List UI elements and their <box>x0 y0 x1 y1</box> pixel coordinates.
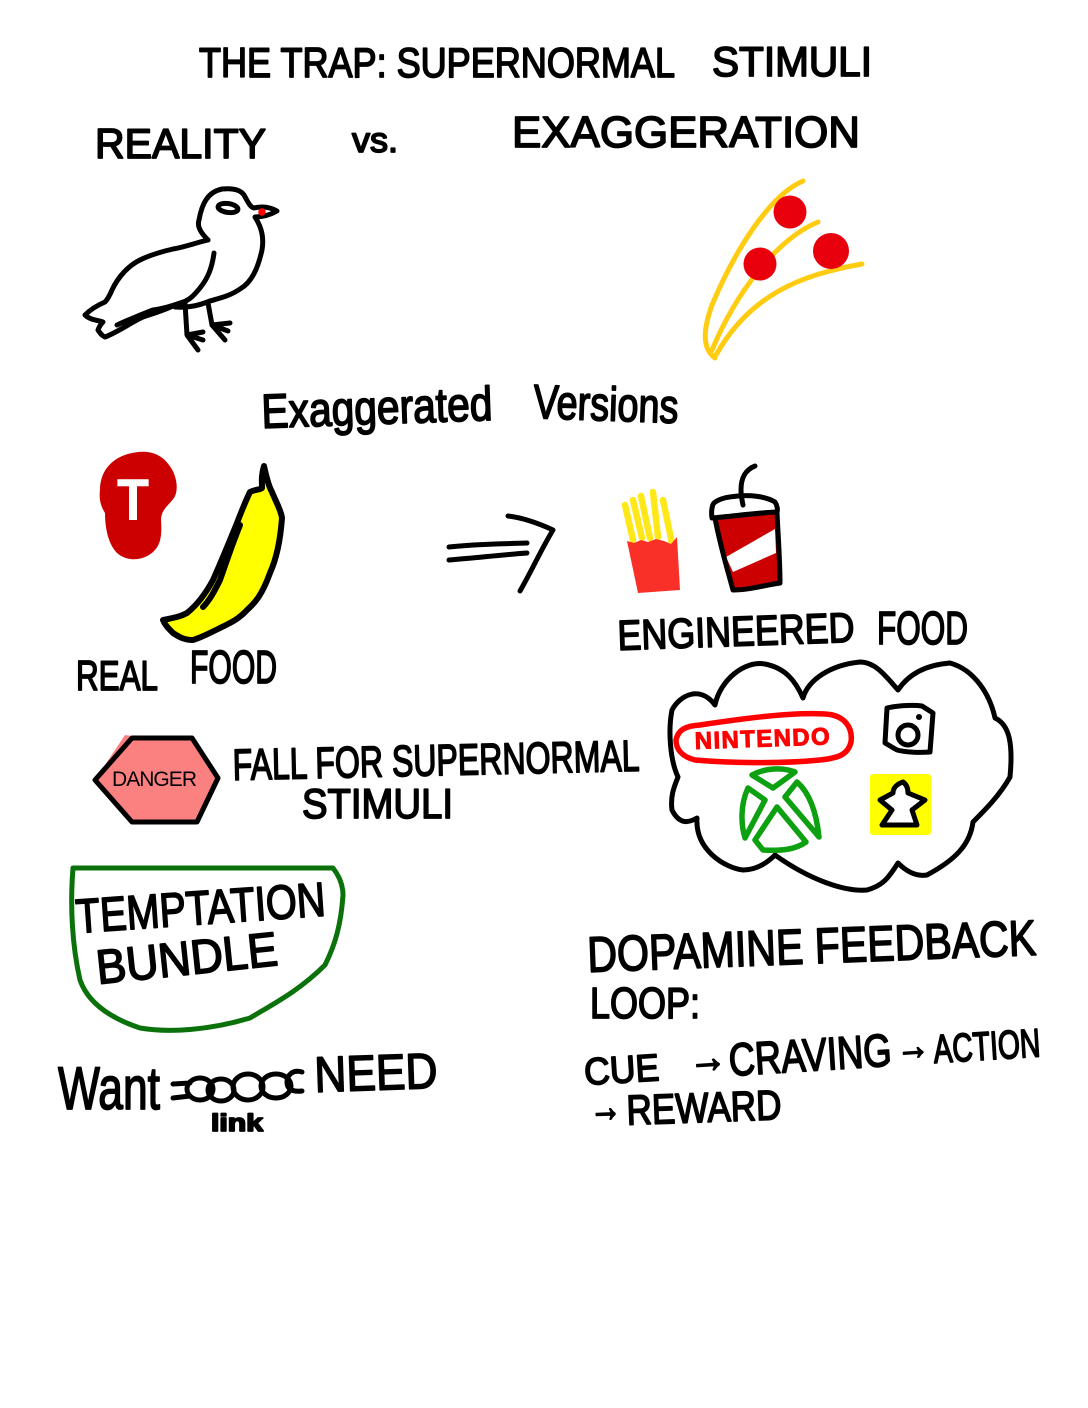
panel: temptation bundle: BUNDLE <box>94 923 280 995</box>
title: STIMULI <box>712 38 872 85</box>
panel: temptation bundle <box>72 868 343 1030</box>
text: want chain need: NEED <box>313 1043 438 1103</box>
label: real food: REAL <box>76 652 158 699</box>
thought cloud: brands <box>670 662 1011 890</box>
text: fall for supernormal stimuli: STIMULI <box>302 780 453 827</box>
icon: chain link <box>173 1071 302 1101</box>
label: engineered food: ENGINEERED <box>617 604 855 659</box>
icon: danger sign: DANGER <box>112 768 197 791</box>
heading: exaggerated versions: Exaggerated <box>261 378 493 439</box>
heading: exaggerated versions: Versions <box>533 376 679 434</box>
text: want chain need <box>58 1043 438 1137</box>
text: cue craving action reward: → <box>895 1023 931 1069</box>
text: want chain need: Want <box>58 1055 160 1122</box>
icon: tomato logo blob <box>100 452 177 559</box>
heading: vs.: vs. <box>352 121 398 160</box>
heading: exaggeration: EXAGGERATION <box>512 108 860 157</box>
label: real food: FOOD <box>190 641 277 693</box>
logo: instagram <box>885 705 933 752</box>
icon: soda cup <box>712 466 780 590</box>
text: dopamine feedback loop: LOOP: <box>590 979 700 1028</box>
text: cue craving action reward: REWARD <box>626 1081 782 1134</box>
title: THE TRAP: SUPERNORMAL <box>199 39 675 86</box>
logo: xbox <box>742 769 819 850</box>
panel: temptation bundle: TEMPTATION <box>74 874 327 944</box>
arrow: real to engineered <box>449 516 553 591</box>
logo: snapchat <box>870 774 931 835</box>
logo: nintendo <box>676 714 851 763</box>
label: real food <box>76 641 277 699</box>
text: cue craving action reward: → <box>589 1082 622 1132</box>
icon: bird <box>85 189 277 350</box>
text: cue craving action reward: → <box>687 1032 728 1083</box>
logo: nintendo: NINTENDO <box>694 723 830 755</box>
label: link: link <box>211 1110 264 1137</box>
icon: banana <box>163 466 282 640</box>
icon: danger sign <box>95 735 218 822</box>
text: fall for supernormal stimuli <box>232 732 640 827</box>
text: cue craving action reward: ACTION <box>932 1021 1042 1072</box>
text: cue craving action reward <box>582 1012 1042 1135</box>
heading: exaggerated versions <box>261 376 679 439</box>
text: cue craving action reward: CRAVING <box>727 1024 893 1086</box>
icon: fries <box>625 492 680 593</box>
label: engineered food: FOOD <box>877 602 968 654</box>
icon: pizza slice <box>705 181 862 358</box>
text: cue craving action reward: CUE <box>583 1047 660 1094</box>
text: dopamine feedback loop <box>586 910 1037 1028</box>
text: fall for supernormal stimuli: FALL FOR SUPERNORMAL <box>232 732 640 790</box>
icon: tomato logo blob: T <box>117 468 149 533</box>
heading: reality: REALITY <box>95 120 266 167</box>
